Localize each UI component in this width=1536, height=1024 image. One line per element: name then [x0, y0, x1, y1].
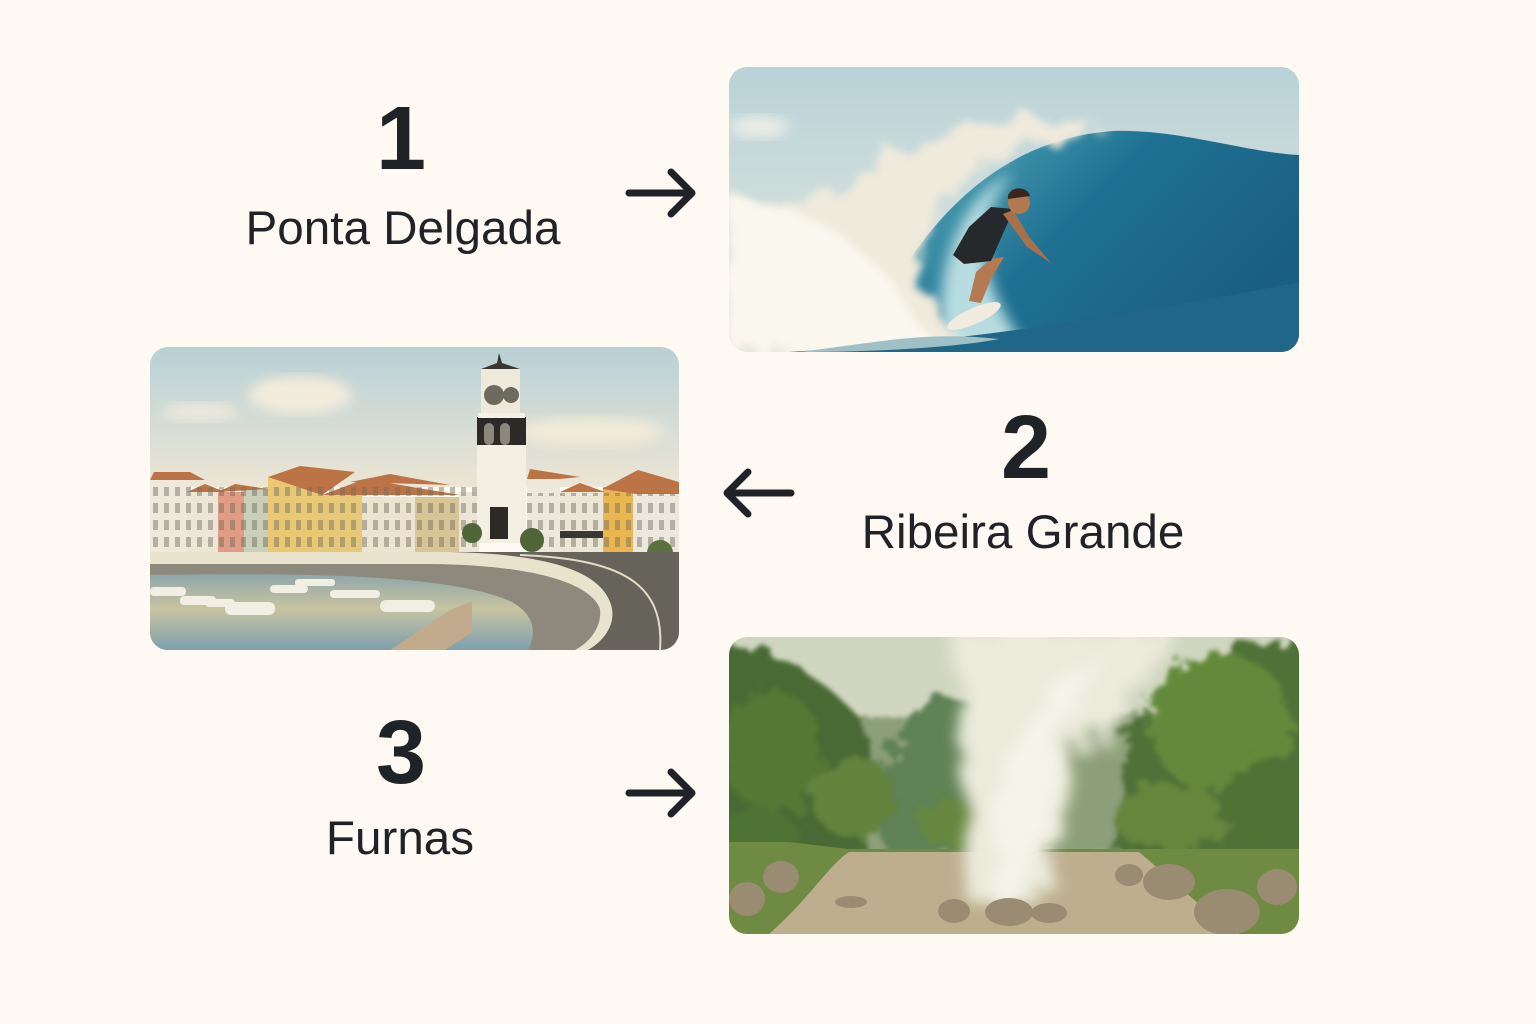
steam plume [954, 627, 1174, 907]
road lines [520, 555, 660, 650]
label: Ponta Delgada: Ponta Delgada [246, 202, 560, 255]
surfer [944, 188, 1051, 335]
buildings [150, 466, 679, 570]
number 2: 2 [1001, 398, 1051, 498]
label: Ribeira Grande: Ribeira Grande [862, 506, 1184, 559]
arrow 2 [724, 468, 794, 518]
image: surfer in wave [729, 67, 1299, 352]
arrow 1 [626, 168, 696, 218]
boats [150, 579, 435, 615]
clock tower [462, 353, 673, 566]
number 1: 1 [376, 89, 426, 189]
rocks [729, 861, 1297, 935]
image: harbour town with clock tower [150, 347, 679, 650]
image: steam geyser in forest [729, 637, 1299, 934]
number 3: 3 [376, 703, 426, 803]
label: Furnas: Furnas [326, 812, 474, 865]
arrow 3 [626, 768, 696, 818]
water [150, 574, 533, 650]
